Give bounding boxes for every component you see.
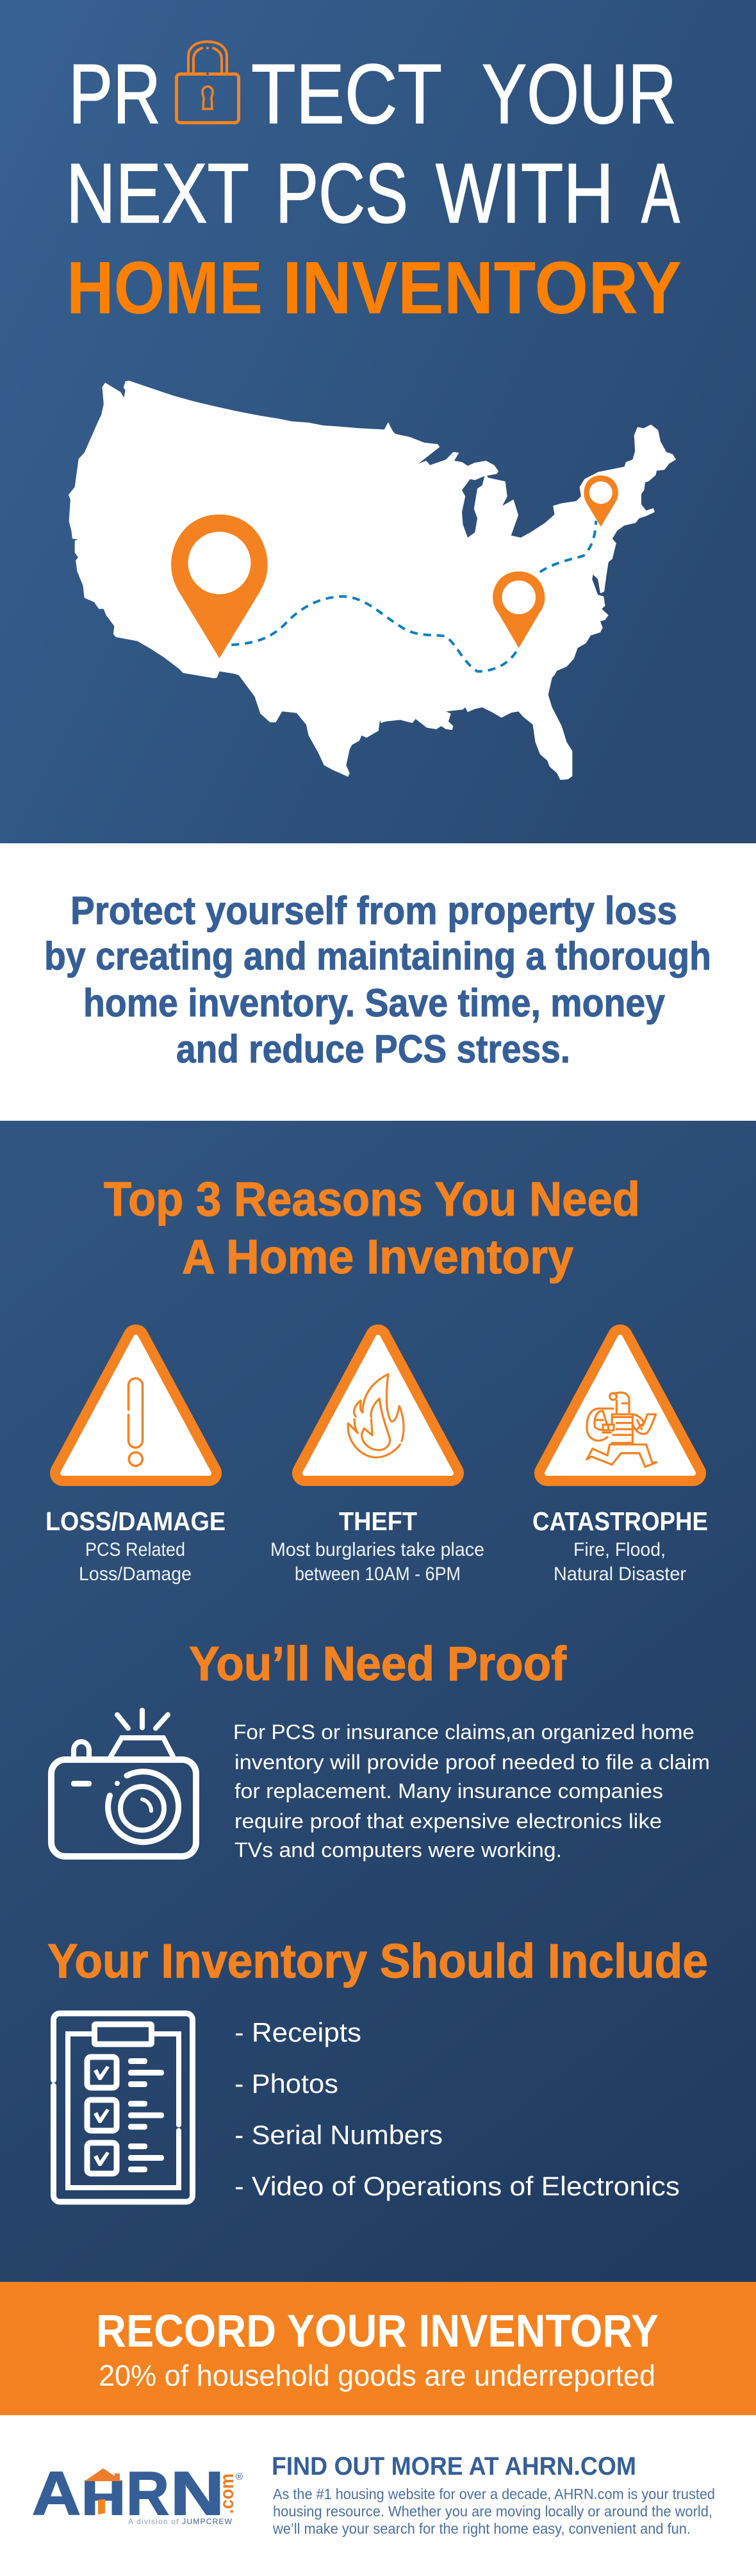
label: theft: THEFT [339,1507,417,1536]
description: theft [270,1539,484,1585]
description: loss/damage: PCS Related [85,1539,185,1560]
title line 2: A [641,146,680,240]
text: proof explanation [233,1721,710,1862]
banner statistic: 20% of household goods are underreported [99,2359,655,2392]
title line 2: WITH [436,146,614,240]
text: proof explanation: For PCS or insurance claims,an organized home [233,1721,694,1744]
intro text [44,889,711,1071]
logo wordmark: H [81,2471,126,2525]
footer description: we’ll make your search for the right home easy, convenient and fun. [272,2520,691,2537]
title line 2: PCS [275,146,408,240]
title line 1: PR [69,47,161,141]
heading: you'll need proof: You’ll Need Proof [189,1637,567,1690]
intro text: and reduce PCS stress. [176,1027,570,1071]
icon: large map pin [171,515,268,658]
footer description: housing resource. Whether you are moving locally or around the world, [273,2503,712,2520]
text: proof explanation: TVs and computers were working. [234,1838,562,1862]
icon: warning triangle with flame [297,1330,459,1481]
footer heading: FIND OUT MORE AT AHRN.COM [272,2452,636,2481]
title line 2: NEXT [66,146,249,240]
dashed route [231,521,596,672]
logo roof [85,2468,122,2481]
label: catastrophe: CATASTROPHE [532,1507,708,1536]
heading: your inventory should include: Your Inventory Should Include [47,1934,708,1988]
intro text: Protect yourself from property loss [70,889,677,932]
intro text: home inventory. Save time, money [83,981,665,1025]
icon: medium map pin [493,572,545,648]
heading: top 3 reasons [104,1172,640,1284]
icon: warning triangle with exclamation [55,1330,217,1481]
list: inventory contents: - Photos [234,2068,338,2099]
logo wordmark: N [170,2459,224,2528]
icon: checklist clipboard [54,2013,192,2202]
list: inventory contents [234,2017,680,2201]
list: inventory contents: - Video of Operations of Electronics [234,2171,680,2201]
logo .com: .com [217,2473,238,2514]
description: catastrophe: Fire, Flood, [573,1539,666,1560]
description: loss/damage: Loss/Damage [79,1564,192,1585]
banner background [0,2282,756,2415]
hero background [0,0,756,843]
icon: small map pin [584,475,618,527]
reason: theft [270,1330,484,1585]
title line 1: YOUR [482,47,677,141]
logo: AHRN.com [32,2459,243,2528]
description: loss/damage [79,1539,192,1585]
title line 1: TECT [251,47,442,141]
title line 3 [67,246,682,329]
details background [0,1121,756,2282]
map of the United States with route [69,381,676,780]
icon: padlock standing in for the letter O [177,42,238,123]
description: theft: between 10AM - 6PM [295,1564,461,1585]
intro background [0,843,756,1121]
USA silhouette [69,381,676,780]
banner heading: RECORD YOUR INVENTORY [96,2306,659,2357]
footer description: As the #1 housing website for over a decade, AHRN.com is your trusted [273,2486,715,2502]
reason: catastrophe [532,1330,708,1585]
heading: top 3 reasons: A Home Inventory [182,1230,573,1284]
text: proof explanation: require proof that expensive electronics like [234,1810,662,1833]
reason: loss/damage [45,1330,226,1585]
logo wordmark: R [126,2459,169,2528]
description: catastrophe: Natural Disaster [554,1564,686,1585]
list: inventory contents: - Receipts [234,2017,361,2047]
panel: footer [0,2415,756,2576]
label: loss/damage: LOSS/DAMAGE [45,1507,226,1536]
logo tagline: A division of JUMPCREW [128,2517,233,2526]
title line 3: INVENTORY [283,246,682,329]
logo door [98,2499,105,2514]
text: proof explanation: for replacement. Many insurance companies [234,1779,663,1803]
description: theft: Most burglaries take place [270,1539,484,1560]
icon: warning triangle with running figure [539,1330,701,1481]
title line 1 [69,47,677,141]
logo wordmark: A [32,2459,81,2528]
title line 3: HOME [67,246,263,329]
description: catastrophe [554,1539,686,1585]
panel: record your inventory banner [0,2282,756,2415]
title [66,42,682,329]
panel: reasons and details [0,1121,756,2282]
icon: camera [51,1710,196,1856]
logo registered mark: ® [236,2472,243,2482]
panel: hero [0,0,756,843]
footer description [272,2486,715,2537]
list: inventory contents: - Serial Numbers [234,2120,443,2150]
heading: top 3 reasons: Top 3 Reasons You Need [104,1172,640,1226]
text: proof explanation: inventory will provide proof needed to file a claim [234,1751,710,1774]
title line 2 [66,146,680,240]
logo wordmark [32,2459,224,2528]
footer background [0,2415,756,2576]
panel: intro [0,843,756,1121]
